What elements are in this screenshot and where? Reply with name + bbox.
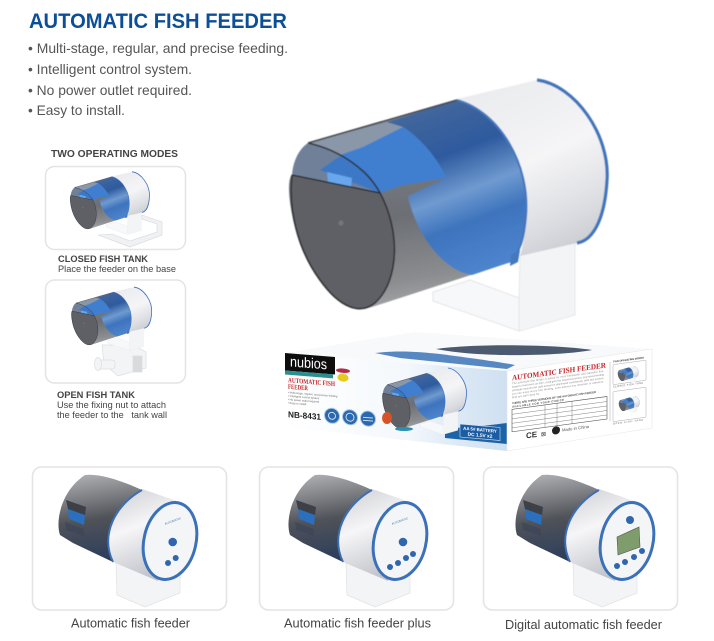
battery label: AA 5# BATTERY xyxy=(463,426,497,434)
icon: feeder on base xyxy=(70,172,149,234)
box feature list: • Easy to install xyxy=(288,401,307,406)
box operating modes column: OPEN FISH TANK xyxy=(613,419,643,426)
box product name: AUTOMATIC FISH xyxy=(288,377,336,388)
heading: two operating modes: TWO OPERATING MODES xyxy=(51,149,178,160)
title: AUTOMATIC FISH FEEDER xyxy=(29,10,287,33)
panel: digital automatic fish feeder xyxy=(484,467,678,610)
caption: closed fish tank xyxy=(58,254,176,275)
feature bullet list: • No power outlet required. xyxy=(28,82,192,98)
certification marks: ⊠ xyxy=(541,432,546,438)
panel: open fish tank xyxy=(46,280,186,383)
box feature list: • Intelligent control system xyxy=(288,394,320,400)
box description: The automatic fish feeder is suited for most freshwater and saltwater fish, xyxy=(512,369,604,385)
feature bullet list: • Multi-stage, regular, and precise feeding. xyxy=(28,40,288,56)
fish illustration xyxy=(382,412,413,431)
face label: AUTOMATIC xyxy=(391,516,409,526)
box right face xyxy=(507,349,652,451)
caption: open fish tank xyxy=(57,390,167,421)
box feeder image xyxy=(382,368,467,435)
model number: NB-8431 xyxy=(288,409,321,422)
box product name: FEEDER xyxy=(288,384,308,392)
icon: fixing nut xyxy=(94,345,146,376)
box table: AVAILABLE FOR YOUR CHOICE xyxy=(512,398,564,409)
feeder illustration xyxy=(288,475,434,607)
box table xyxy=(512,388,607,432)
control buttons xyxy=(165,538,179,566)
box table: THERE ARE THREE VERSIONS OF THE AUTOMATIC FISH FEEDER xyxy=(512,390,596,405)
main product image: fish feeder xyxy=(289,80,607,331)
panel: closed fish tank xyxy=(46,166,186,250)
box description: forget to feed them on time, it will give the balanced portion, and timed feeding xyxy=(512,372,605,389)
face label: AUTOMATIC xyxy=(164,516,182,526)
box right title: AUTOMATIC FISH FEEDER xyxy=(512,361,606,382)
box feature list: • Multi-stage, regular, and precise feeding xyxy=(288,390,338,398)
box mini feeder 1 xyxy=(618,366,638,383)
panel: automatic fish feeder xyxy=(32,467,226,610)
box feature list: • No power outlet required xyxy=(288,397,320,404)
feature bullet list: • Easy to install. xyxy=(28,102,125,118)
box mini feeder 2 xyxy=(619,396,639,413)
box round feature icons xyxy=(324,408,376,427)
box product name xyxy=(288,377,336,395)
box operating modes column: TWO OPERATING MODES xyxy=(613,355,644,364)
icon: feeder on tank wall xyxy=(71,287,152,351)
box description xyxy=(512,369,605,399)
icon glyphs xyxy=(328,411,373,423)
brand logo: nubios xyxy=(290,354,327,373)
feature bullet list xyxy=(28,40,288,118)
box left face xyxy=(284,353,507,451)
box description: Fish are well cared for. xyxy=(512,392,540,399)
certification marks: CE xyxy=(526,430,538,440)
box operating modes column xyxy=(613,355,646,426)
control buttons xyxy=(614,516,645,569)
feeder illustration xyxy=(58,475,204,607)
caption: closed fish tank: CLOSED FISH TANK xyxy=(58,254,148,265)
caption: open fish tank: the feeder to the tank wall xyxy=(57,410,167,421)
caption: closed fish tank: Place the feeder on the base xyxy=(58,264,176,275)
box description: schedule ensures the right amount is dispensed consistently. With this system, xyxy=(512,376,604,392)
control buttons xyxy=(387,538,416,570)
box top face xyxy=(285,332,652,371)
box feature list xyxy=(288,390,338,409)
feeder illustration xyxy=(515,475,661,607)
caption: automatic fish feeder: Automatic fish feeder xyxy=(71,616,191,630)
caption: digital automatic fish feeder: Digital automatic fish feeder xyxy=(505,617,663,632)
icon: base frame xyxy=(98,215,162,247)
certification marks: Made in China xyxy=(562,424,590,433)
battery label xyxy=(460,424,500,440)
box operating modes column: CLOSED FISH TANK xyxy=(613,382,643,389)
feature bullet list: • Intelligent control system. xyxy=(28,61,192,77)
product box xyxy=(284,332,652,451)
battery label: DC 1.5V x2 xyxy=(468,432,493,440)
panel: automatic fish feeder plus xyxy=(260,467,454,610)
box description: you can enjoy worry-free feeding, even without any reminder or attention. xyxy=(512,379,604,396)
caption: open fish tank: Use the fixing nut to attach xyxy=(57,400,166,411)
caption: open fish tank: OPEN FISH TANK xyxy=(57,390,135,401)
certification marks xyxy=(526,422,590,440)
caption: automatic fish feeder plus: Automatic fish feeder plus xyxy=(284,616,431,630)
LCD screen xyxy=(617,527,640,555)
